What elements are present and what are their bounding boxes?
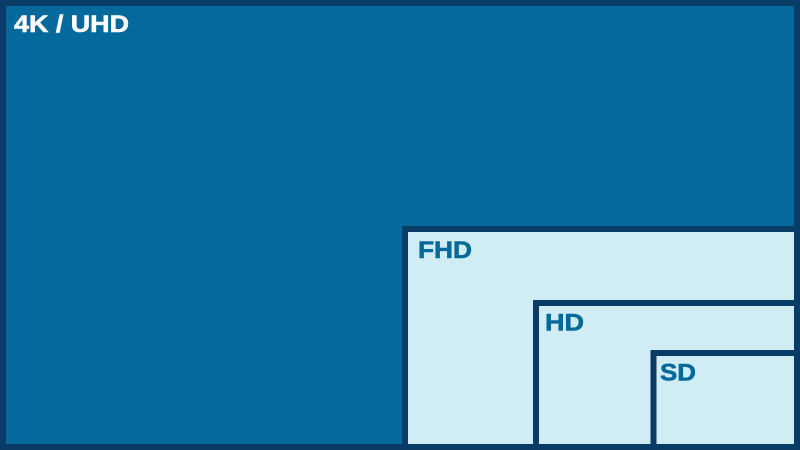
label: FHD: FHD bbox=[418, 237, 472, 264]
panel: SD bbox=[650, 350, 800, 450]
panel: FHD bbox=[402, 226, 800, 450]
label: 4K / UHD: 4K / UHD bbox=[14, 11, 129, 38]
label: SD: SD bbox=[660, 360, 696, 386]
panel: HD bbox=[533, 300, 800, 450]
label: HD: HD bbox=[545, 310, 584, 336]
